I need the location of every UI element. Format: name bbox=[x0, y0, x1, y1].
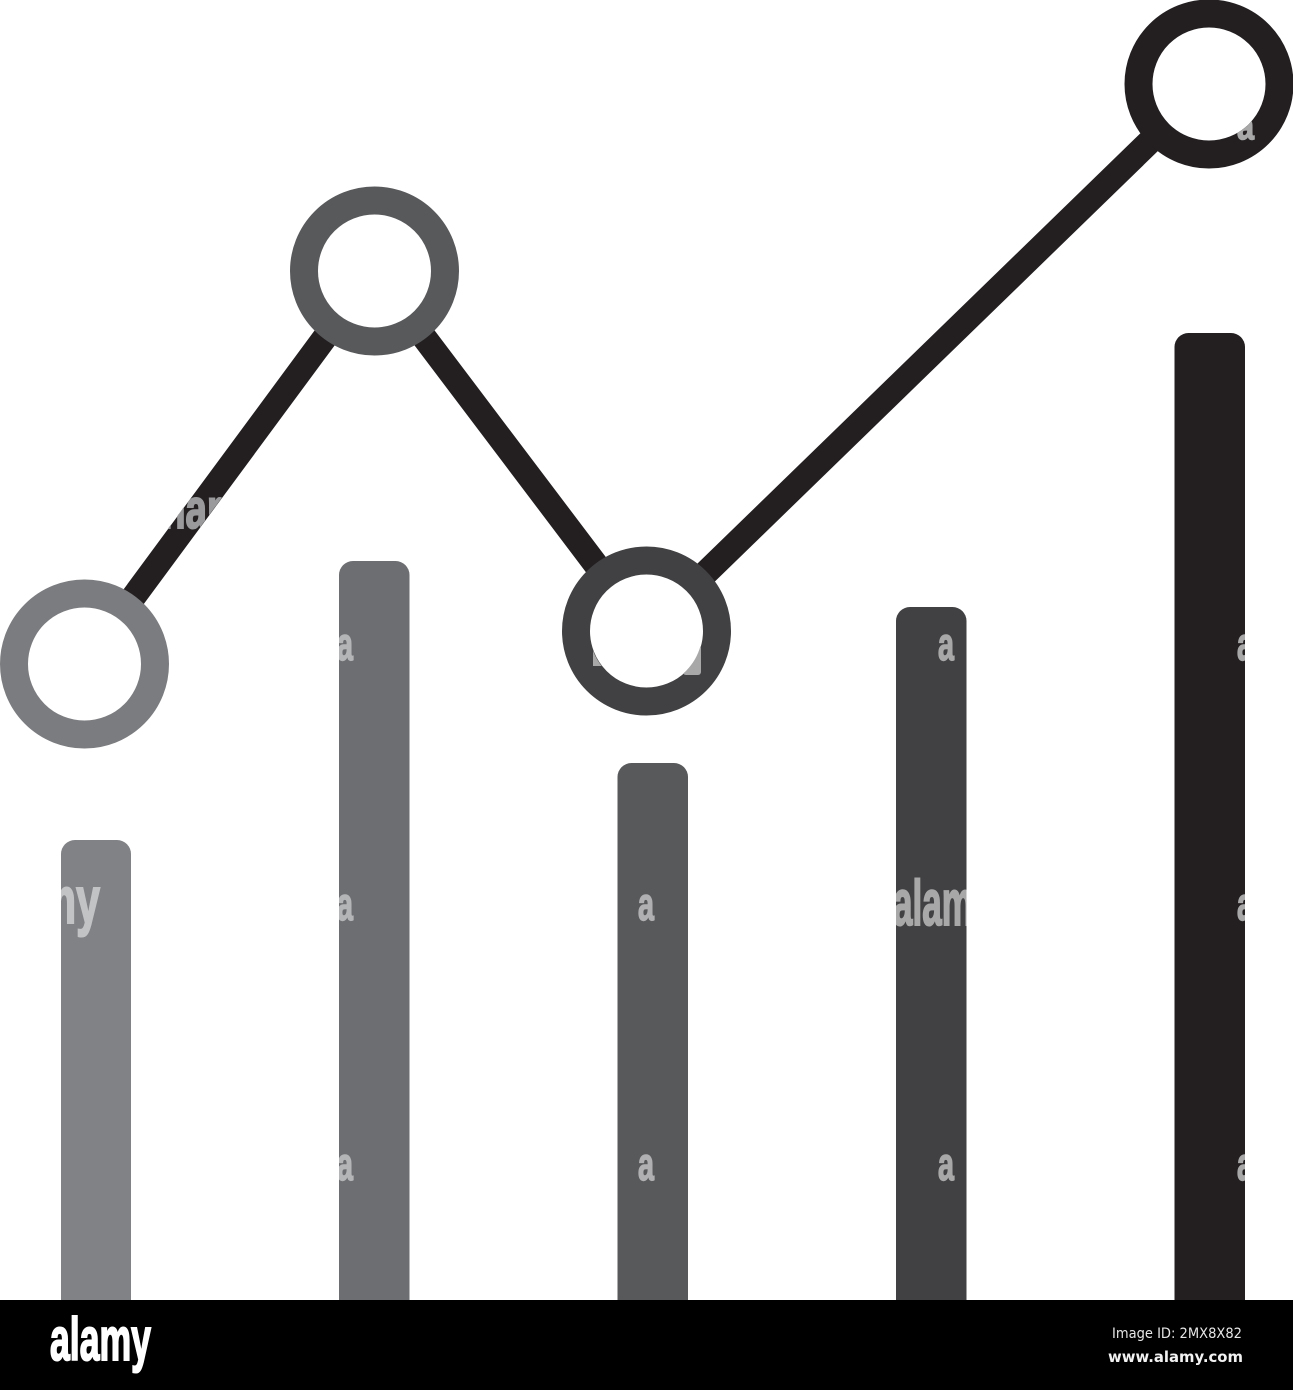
watermark on bar 5: a bbox=[1237, 618, 1253, 670]
watermark on bar 4: a bbox=[938, 618, 954, 670]
watermark on bar 5 bbox=[1237, 634, 1245, 1182]
bar 4 bbox=[896, 607, 966, 1327]
bar chart bbox=[61, 333, 1245, 1327]
watermark on bar 4 bbox=[896, 634, 966, 1182]
watermark on trend line: nar bbox=[162, 477, 222, 540]
watermark on bar 2: a bbox=[337, 618, 353, 670]
watermark on bar 3: a bbox=[638, 878, 654, 930]
watermark on bar 2 bbox=[339, 634, 354, 1182]
watermark on bar 5: a bbox=[1237, 878, 1253, 930]
data point markers bbox=[14, 14, 1280, 734]
image id: Image ID: 2MX8X82 bbox=[1112, 1326, 1242, 1342]
footer logo: alamy bbox=[50, 1306, 151, 1373]
bar 2 bbox=[339, 561, 410, 1321]
marker 4 bbox=[1138, 14, 1280, 154]
watermark on marker 3 bbox=[593, 645, 701, 675]
marker 1 bbox=[14, 594, 155, 734]
watermark on bar 2: a bbox=[337, 878, 353, 930]
marker 2 bbox=[304, 200, 445, 342]
watermark on bar 5: a bbox=[1237, 1138, 1253, 1190]
bar 1 bbox=[61, 840, 131, 1320]
website: www.alamy.com bbox=[1108, 1348, 1243, 1366]
watermark on bar 2: a bbox=[337, 1138, 353, 1190]
marker 3 bbox=[576, 560, 717, 702]
watermark on bar 3 bbox=[638, 878, 654, 1190]
watermark on marker 4: a bbox=[1237, 106, 1255, 148]
watermark on bar 3: a bbox=[638, 1138, 654, 1190]
footer bar bbox=[0, 1300, 1293, 1390]
connecting trend line bbox=[84, 84, 1209, 664]
watermark on bar 4: a bbox=[938, 1138, 954, 1190]
watermark on bar 4: alam bbox=[893, 867, 973, 939]
watermark fragments bbox=[38, 106, 1255, 1190]
bar 5 bbox=[1174, 333, 1245, 1323]
bar 3 bbox=[618, 763, 688, 1323]
watermark on bar 1: my bbox=[38, 863, 100, 937]
